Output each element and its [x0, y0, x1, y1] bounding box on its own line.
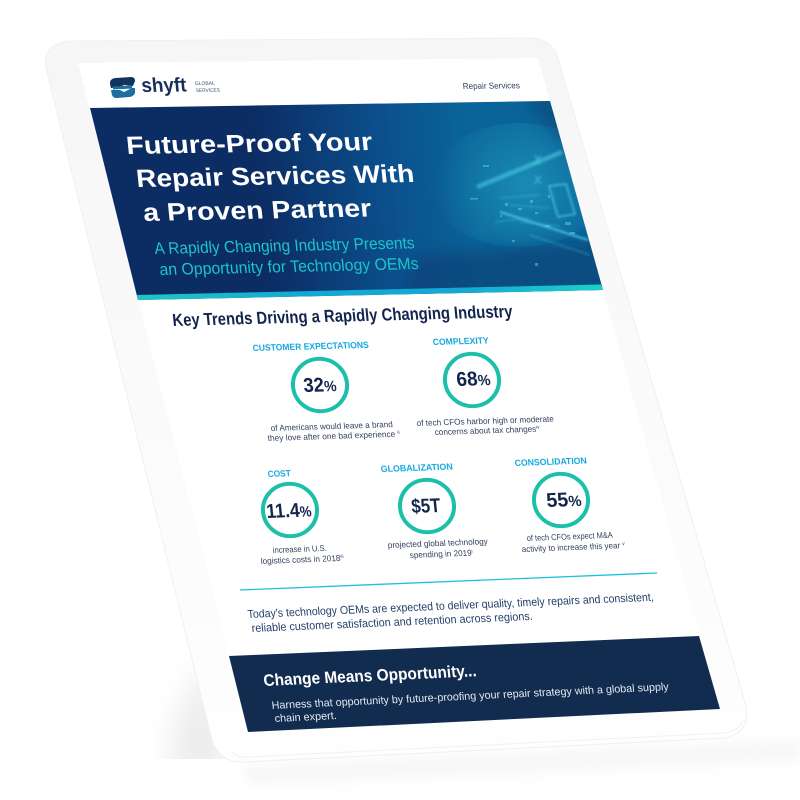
ring [399, 479, 455, 533]
body text: reliable customer satisfaction and retention across regions. [251, 611, 533, 635]
logo [110, 74, 221, 98]
body text [247, 592, 654, 635]
label: CUSTOMER EXPECTATIONS [252, 340, 369, 353]
ring [533, 473, 589, 527]
description: projected global technology [387, 536, 489, 550]
value: 32% [302, 374, 337, 397]
description: iii [340, 554, 344, 560]
description: i [471, 549, 473, 555]
header label: Repair Services [462, 80, 520, 91]
stat: consolidation [514, 456, 626, 554]
banner accent stripe [137, 284, 603, 300]
description [387, 536, 489, 560]
device shadow [170, 660, 800, 785]
panel: change means opportunity [229, 636, 720, 732]
value: $5T [410, 495, 442, 518]
logo tagline: SERVICES [196, 88, 221, 94]
label: COST [267, 468, 292, 479]
panel heading: Change Means Opportunity... [263, 661, 477, 690]
tablet screen [78, 58, 720, 732]
banner title: a Proven Partner [142, 194, 373, 227]
panel text: Harness that opportunity by future-proofing your repair strategy with a global supply [271, 681, 670, 712]
banner subtitle: A Rapidly Changing Industry Presents [154, 233, 415, 258]
description: of tech CFOs expect M&A [526, 530, 614, 543]
banner title: Repair Services With [135, 160, 416, 193]
description: of Americans would leave a brand [270, 419, 394, 433]
value: 68% [455, 368, 491, 391]
description: ii [397, 430, 400, 436]
panel background [229, 636, 720, 732]
label: COMPLEXITY [432, 335, 489, 347]
logo tagline: GLOBAL [195, 81, 215, 87]
value: 11.4% [265, 499, 312, 523]
logo tagline [195, 81, 221, 94]
label: CONSOLIDATION [514, 456, 587, 468]
stat: globalization [380, 462, 489, 560]
banner [90, 95, 610, 300]
logo wordmark: shyft [140, 74, 188, 97]
value: 55% [545, 489, 582, 512]
label: GLOBALIZATION [380, 462, 453, 474]
panel text: chain expert. [274, 710, 337, 725]
ring [292, 358, 348, 412]
description [521, 530, 626, 554]
tablet frame [46, 38, 747, 762]
ring [444, 353, 500, 407]
description: iv [536, 425, 540, 431]
section heading: Key Trends Driving a Rapidly Changing Industry [171, 301, 514, 330]
stat: cost [260, 468, 344, 566]
description: of tech CFOs harbor high or moderate [416, 414, 555, 428]
description [260, 543, 344, 566]
stat: complexity [416, 335, 555, 437]
ring [262, 483, 318, 537]
banner subtitle [154, 233, 419, 279]
stat: customer expectations [252, 340, 400, 443]
description: logistics costs in 2018 [260, 553, 343, 566]
description: increase in U.S. [272, 543, 327, 555]
banner subtitle: an Opportunity for Technology OEMs [159, 254, 419, 279]
description: concerns about tax changes [434, 424, 540, 437]
banner title: Future-Proof Your [125, 128, 374, 160]
banner title [125, 128, 416, 227]
description [267, 419, 400, 443]
description [416, 414, 555, 437]
icon: shyft logo mark [110, 77, 135, 98]
description: spending in 2019 [409, 548, 474, 560]
body text: Today's technology OEMs are expected to deliver quality, timely repairs and consistent, [247, 592, 654, 621]
banner background [90, 101, 603, 300]
description: v [622, 541, 625, 547]
tablet mockup illustration [45, 38, 747, 762]
description: they love after one bad experience [267, 429, 397, 443]
description: activity to increase this year [521, 540, 625, 554]
banner tech image [404, 101, 603, 294]
